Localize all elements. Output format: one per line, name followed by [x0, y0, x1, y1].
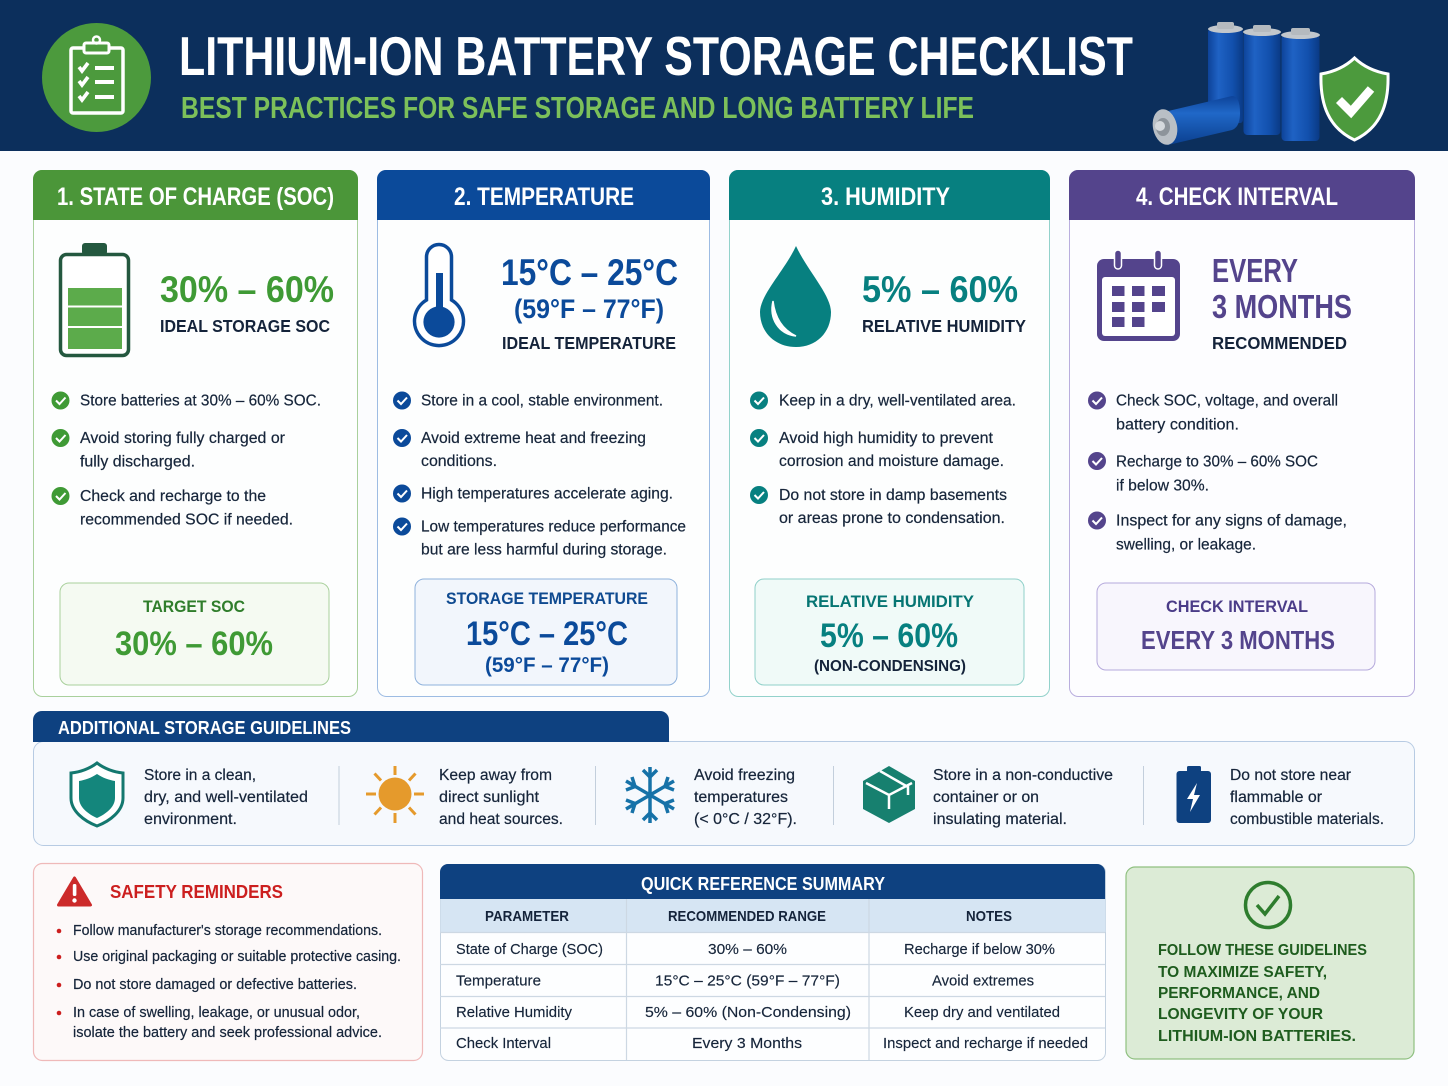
list: safety reminders [57, 923, 401, 1041]
table row: state of charge: 30% – 60% [708, 941, 787, 958]
table header row [440, 899, 1106, 932]
panel: check interval [1069, 170, 1415, 696]
text: follow these guidelines: TO MAXIMIZE SAFETY, [1158, 964, 1327, 981]
label: recommended: RECOMMENDED [1212, 333, 1347, 353]
check list: temperature: Avoid extreme heat and freezing [421, 430, 646, 447]
callout: storage temperature: 15°C – 25°C [466, 615, 628, 653]
panel: additional storage guidelines [33, 711, 1414, 846]
title: LITHIUM-ION BATTERY STORAGE CHECKLIST [179, 25, 1133, 87]
check list: humidity: Do not store in damp basements [779, 487, 1007, 504]
table header row: PARAMETER [485, 908, 569, 925]
check list: interval: if below 30%. [1116, 478, 1209, 494]
table row: state of charge [456, 941, 1055, 958]
list: safety reminders: Do not store damaged or defective batteries. [73, 977, 357, 993]
list: safety reminders: isolate the battery and seek professional advice. [73, 1025, 382, 1041]
item: clean environment: dry, and well-ventilated [144, 789, 308, 806]
item: away from flammables [1176, 766, 1384, 828]
icon: warning triangle [58, 878, 90, 905]
table row: state of charge: Recharge if below 30% [904, 941, 1055, 958]
text: follow these guidelines [1158, 942, 1367, 1045]
check list: temperature [393, 392, 686, 558]
check list: interval: Check SOC, voltage, and overall [1116, 392, 1338, 410]
heading: state of charge: 1. STATE OF CHARGE (SOC) [57, 183, 334, 211]
icon: sun [366, 766, 424, 823]
table row: relative humidity: 5% – 60% (Non-Condensing) [645, 1004, 851, 1021]
icon: box [863, 766, 915, 823]
table row: relative humidity: Relative Humidity [456, 1004, 572, 1021]
item: clean environment: environment. [144, 811, 237, 828]
table title bar [440, 864, 1105, 899]
item: non-conductive container [863, 766, 1113, 828]
callout: target SOC: TARGET SOC [143, 597, 245, 616]
header banner [0, 0, 1448, 151]
panel: safety reminders [34, 864, 422, 1060]
list: safety reminders: Use original packaging or suitable protective casing. [73, 949, 401, 965]
callout: storage temperature [415, 579, 677, 685]
table row: temperature [456, 972, 1034, 990]
label: ideal storage SOC: IDEAL STORAGE SOC [160, 316, 330, 336]
check list: interval: swelling, or leakage. [1116, 536, 1256, 554]
heading: temperature: 2. TEMPERATURE [454, 183, 634, 211]
check list: humidity [750, 392, 1016, 527]
value: SOC range: 30% – 60% [160, 269, 334, 310]
value: 3 months: 3 MONTHS [1212, 288, 1352, 325]
check list: SOC [52, 392, 321, 528]
check list: humidity: Avoid high humidity to prevent [779, 430, 994, 447]
icon: battery with bolt [1176, 766, 1211, 823]
table row: relative humidity: Keep dry and ventilated [904, 1004, 1060, 1021]
check list: SOC: recommended SOC if needed. [80, 512, 293, 528]
item: non-conductive container: insulating material. [933, 811, 1067, 828]
table row: check interval [456, 1035, 1088, 1052]
panel: closing advice [1126, 867, 1414, 1059]
callout: relative humidity [755, 579, 1024, 685]
callout: target SOC [60, 583, 329, 685]
check list: interval: battery condition. [1116, 416, 1239, 434]
value: temperature range: 15°C – 25°C [501, 252, 678, 293]
value: fahrenheit range: (59°F – 77°F) [514, 294, 664, 324]
check list: SOC: Store batteries at 30% – 60% SOC. [80, 392, 321, 410]
value: humidity range: 5% – 60% [862, 269, 1018, 310]
table row: check interval: Inspect and recharge if needed [883, 1035, 1088, 1052]
table row: temperature: 15°C – 25°C (59°F – 77°F) [655, 972, 840, 990]
item: avoid sunlight [366, 766, 563, 828]
check list: interval [1088, 392, 1347, 554]
item: avoid freezing: Avoid freezing [694, 767, 795, 784]
heading tab: additional storage guidelines [33, 711, 669, 742]
icon: check circle [1246, 882, 1290, 928]
heading tab: additional storage guidelines: ADDITIONAL STORAGE GUIDELINES [58, 718, 351, 738]
heading: check interval [1069, 170, 1415, 220]
item: clean environment [71, 763, 308, 828]
item: avoid sunlight: direct sunlight [439, 789, 540, 806]
label: relative humidity: RELATIVE HUMIDITY [862, 316, 1026, 336]
callout: target SOC: 30% – 60% [115, 625, 273, 663]
icon: calendar [1097, 250, 1180, 341]
text: follow these guidelines: LONGEVITY OF YOUR [1158, 1006, 1323, 1023]
text: follow these guidelines: LITHIUM-ION BATTERIES. [1158, 1028, 1356, 1045]
icon: batteries [1150, 22, 1320, 147]
heading: state of charge [33, 170, 358, 220]
label: ideal temperature: IDEAL TEMPERATURE [502, 333, 676, 353]
table row: temperature: Avoid extremes [932, 972, 1034, 990]
panel: temperature [377, 170, 710, 696]
item: away from flammables: combustible materials. [1230, 811, 1384, 828]
panel: quick reference summary table [440, 864, 1106, 1060]
check list: SOC: fully discharged. [80, 454, 195, 470]
callout: relative humidity: RELATIVE HUMIDITY [806, 592, 975, 611]
callout: relative humidity: (NON-CONDENSING) [814, 658, 966, 675]
list: safety reminders: In case of swelling, leakage, or unusual odor, [73, 1005, 360, 1021]
icon: thermometer [414, 244, 464, 346]
check list: temperature: conditions. [421, 453, 497, 470]
item: avoid sunlight: Keep away from [439, 767, 552, 784]
heading: check interval: 4. CHECK INTERVAL [1136, 183, 1338, 211]
table row: check interval: Check Interval [456, 1035, 551, 1052]
check list: SOC: Check and recharge to the [80, 488, 266, 505]
icon: battery [60, 243, 128, 356]
icon: clipboard checklist [42, 23, 151, 132]
table header row: RECOMMENDED RANGE [668, 908, 826, 925]
item: non-conductive container: Store in a non-conductive [933, 767, 1113, 784]
table header row: NOTES [966, 908, 1012, 925]
check list: SOC: Avoid storing fully charged or [80, 430, 285, 447]
item: avoid freezing: temperatures [694, 789, 788, 806]
check list: humidity: or areas prone to condensation. [779, 510, 1005, 527]
check list: temperature: but are less harmful during storage. [421, 542, 667, 558]
check list: humidity: Keep in a dry, well-ventilated area. [779, 392, 1016, 410]
callout: storage temperature: STORAGE TEMPERATURE [446, 589, 648, 608]
icon: water drop [760, 246, 831, 347]
callout: relative humidity: 5% – 60% [820, 617, 958, 655]
check list: temperature: Low temperatures reduce performance [421, 518, 686, 536]
check list: temperature: Store in a cool, stable environment. [421, 392, 663, 410]
item: avoid freezing [626, 767, 797, 828]
table row: temperature: Temperature [456, 972, 541, 990]
heading: safety reminders: SAFETY REMINDERS [110, 882, 283, 902]
item: non-conductive container: container or on [933, 789, 1039, 806]
list: safety reminders: Follow manufacturer's storage recommendations. [73, 923, 382, 939]
icon: shield [71, 763, 123, 826]
icon: snowflake [626, 767, 674, 823]
item: avoid sunlight: and heat sources. [439, 811, 563, 828]
value: every: EVERY [1212, 252, 1298, 289]
text: follow these guidelines: FOLLOW THESE GUIDELINES [1158, 942, 1367, 959]
item: away from flammables: flammable or [1230, 789, 1322, 806]
table title bar: QUICK REFERENCE SUMMARY [641, 873, 886, 894]
check list: temperature: High temperatures accelerate aging. [421, 486, 673, 502]
callout: check interval [1097, 583, 1375, 670]
item: away from flammables: Do not store near [1230, 767, 1351, 784]
panel: humidity [729, 170, 1050, 696]
text: follow these guidelines: PERFORMANCE, AND [1158, 985, 1320, 1002]
table row: state of charge: State of Charge (SOC) [456, 941, 603, 958]
check list: humidity: corrosion and moisture damage. [779, 453, 1004, 470]
item: avoid freezing: (< 0°C / 32°F). [694, 811, 797, 828]
subtitle: BEST PRACTICES FOR SAFE STORAGE AND LONG BATTERY LIFE [181, 90, 974, 125]
check list: interval: Recharge to 30% – 60% SOC [1116, 454, 1318, 470]
callout: check interval: CHECK INTERVAL [1166, 597, 1308, 616]
heading: temperature [377, 170, 710, 220]
item: clean environment: Store in a clean, [144, 767, 256, 784]
table row: relative humidity [456, 1004, 1060, 1021]
heading: humidity [729, 170, 1050, 220]
panel: state of charge [33, 170, 358, 696]
check list: interval: Inspect for any signs of damage, [1116, 512, 1347, 530]
heading: humidity: 3. HUMIDITY [821, 183, 950, 211]
callout: storage temperature: (59°F – 77°F) [485, 654, 609, 677]
icon: green shield with check [1321, 58, 1388, 140]
table row: check interval: Every 3 Months [692, 1035, 802, 1052]
callout: check interval: EVERY 3 MONTHS [1141, 625, 1335, 655]
